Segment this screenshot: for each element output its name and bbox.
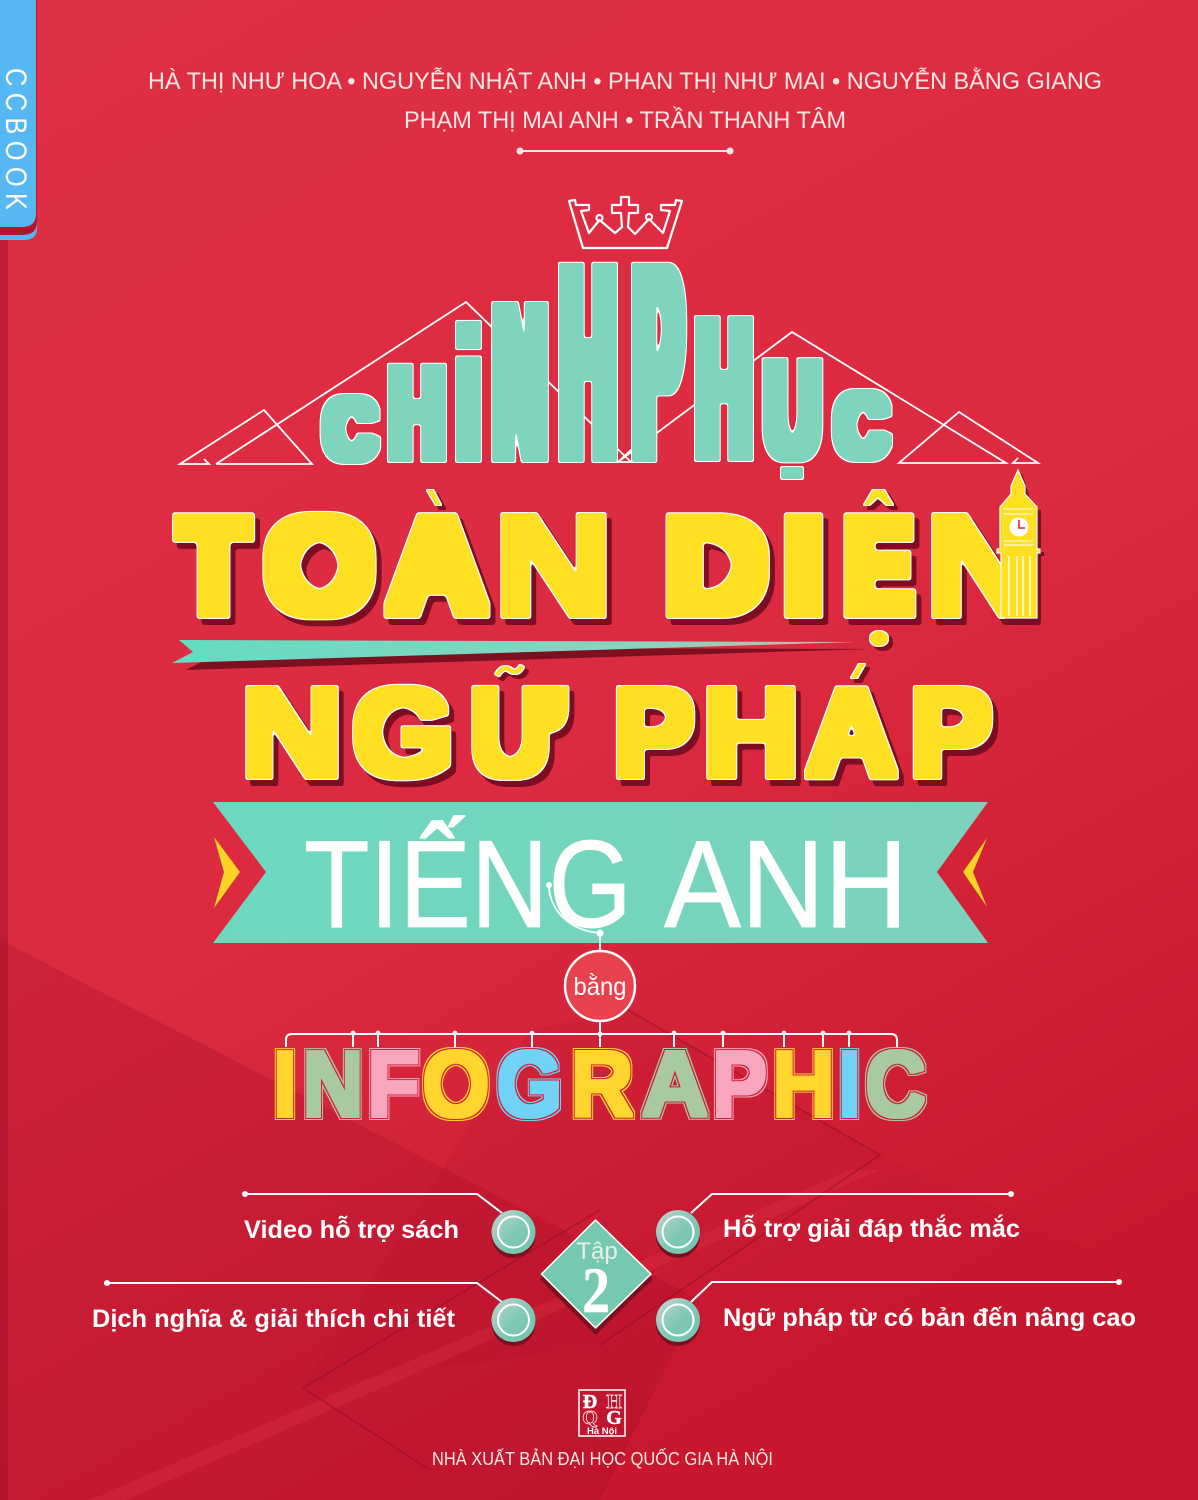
title: NGỮ PHÁP: G: [353, 664, 453, 801]
publisher tab: CCBOOK: [0, 0, 37, 240]
circle: bằng: [565, 951, 635, 1021]
publisher logo: H: [606, 1391, 622, 1413]
feature: Video hỗ trợ sách: Video hỗ trợ sách: [244, 1214, 459, 1244]
title: NGỮ PHÁP: P: [614, 663, 693, 801]
stripe banner: [172, 640, 870, 670]
authors: PHẠM THỊ MAI ANH • TRẦN THANH TÂM: [404, 106, 846, 134]
circle: bằng: bằng: [574, 972, 626, 1001]
title: CHINH PHỤC: Ụ: [765, 335, 820, 486]
title: INFOGRAPHIC: O: [423, 1032, 489, 1136]
title: INFOGRAPHIC: I: [273, 1032, 297, 1136]
title: TOÀN DIỆN: D: [665, 491, 767, 639]
badge: Tập 2: Tập: [576, 1238, 618, 1265]
title: INFOGRAPHIC: F: [368, 1031, 419, 1136]
tree connector: [286, 1021, 897, 1047]
publisher logo: [579, 1390, 625, 1437]
title: CHINH PHỤC: C: [325, 383, 375, 477]
publisher tab: CCBOOK: CCBOOK: [0, 68, 33, 210]
diacritics: [427, 490, 893, 678]
title: TOÀN DIỆN: T: [180, 492, 247, 639]
title: CHINH PHỤC: H: [561, 209, 615, 516]
icon: Big Ben tower: [997, 470, 1044, 621]
title: NGỮ PHÁP: H: [703, 664, 799, 802]
title: TOÀN DIỆN: Ệ: [846, 492, 911, 639]
authors: HÀ THỊ NHƯ HOA • NGUYỄN NHẬT ANH • PHAN THỊ NHƯ MAI • NGUYỄN BẰNG GIANG: [148, 66, 1102, 95]
title: NGỮ PHÁP: [245, 684, 998, 788]
publisher name: NHÀ XUẤT BẢN ĐẠI HỌC QUỐC GIA HÀ NỘI: [432, 1448, 773, 1469]
title: INFOGRAPHIC: G: [497, 1032, 562, 1136]
title: INFOGRAPHIC: I: [839, 1033, 860, 1136]
title: INFOGRAPHIC: R: [571, 1032, 633, 1136]
title: INFOGRAPHIC: [273, 1031, 925, 1136]
ribbon: TIẾNG ANH: [213, 802, 988, 954]
title: TOÀN DIỆN: À: [389, 492, 485, 640]
mountain outlines: [180, 302, 1038, 464]
title: TOÀN DIỆN: O: [266, 492, 373, 639]
title: NGỮ PHÁP: N: [241, 665, 343, 802]
title: INFOGRAPHIC: A: [642, 1032, 708, 1136]
ribbon: TIẾNG ANH: TIẾNG: [304, 815, 632, 954]
publisher logo: Đ: [583, 1391, 597, 1413]
title: INFOGRAPHIC: H: [772, 1032, 835, 1136]
authors: [148, 66, 1102, 134]
title: INFOGRAPHIC: P: [712, 1033, 767, 1136]
title: TOÀN DIỆN: N: [494, 488, 613, 644]
title: CHINH PHỤC: i: [458, 294, 479, 496]
title: CHINH PHỤC: [320, 262, 894, 480]
title: NGỮ PHÁP: Á: [807, 664, 896, 802]
badge: Tập 2: 2: [582, 1255, 610, 1327]
publisher logo: Hà Nội: [587, 1426, 617, 1437]
title: CHINH PHỤC: N: [494, 261, 546, 504]
feature: Hỗ trợ giải đáp: [656, 1191, 1020, 1258]
title: INFOGRAPHIC: C: [866, 1032, 925, 1136]
title: TOÀN DIỆN: I: [783, 491, 824, 639]
title: CHINH PHỤC: H: [390, 342, 444, 485]
feature: Hỗ trợ giải đáp: Hỗ trợ giải đáp thắc mắc: [723, 1213, 1020, 1243]
title: CHINH PHỤC: C: [836, 376, 887, 476]
feature: Dịch nghĩa: [92, 1280, 536, 1346]
publisher logo: G: [606, 1407, 622, 1429]
feature: Dịch nghĩa: Dịch nghĩa & giải thích chi tiết: [92, 1305, 456, 1333]
feature: Ngữ pháp: [656, 1279, 1136, 1346]
icon: crown: [569, 197, 682, 248]
publisher logo: Q: [582, 1407, 598, 1429]
ribbon: TIẾNG ANH: ANH: [664, 816, 908, 954]
title: CHINH PHỤC: P: [634, 208, 682, 516]
title: CHINH PHỤC: H: [697, 280, 751, 498]
title: NGỮ PHÁP: P: [911, 663, 991, 801]
title: NGỮ PHÁP: Ữ: [471, 663, 564, 801]
badge: Tập 2: [542, 1220, 651, 1333]
connector: [546, 882, 604, 950]
feature: Ngữ pháp: Ngữ pháp từ có bản đến nâng cao: [723, 1304, 1136, 1332]
title: TOÀN DIỆN: N: [925, 487, 1042, 645]
title: INFOGRAPHIC: N: [303, 1032, 363, 1136]
feature: Video hỗ trợ sách: [242, 1191, 536, 1258]
title: TOÀN DIỆN: [172, 510, 1041, 626]
